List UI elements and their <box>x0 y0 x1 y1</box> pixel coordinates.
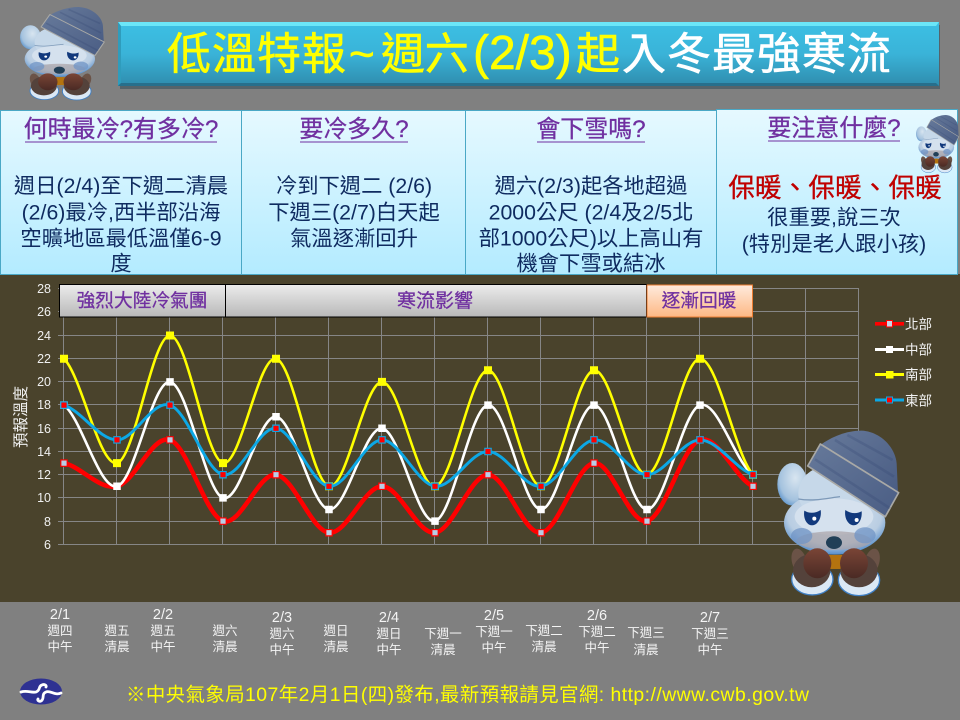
panel: will it snow <box>466 110 716 276</box>
series: central <box>64 382 753 521</box>
x axis labels <box>47 607 729 657</box>
y axis labels: 18 <box>37 398 51 412</box>
body text: (特別是老人跟小孩) <box>742 232 926 256</box>
body text: 空曠地區最低溫僅6-9 <box>20 226 222 250</box>
phase band: gradual warming <box>647 285 752 317</box>
title text: 低溫特報 <box>167 30 347 79</box>
red warning: 保暖、保暖、保暖 <box>728 173 942 203</box>
title text: 入冬最強寒流 <box>622 30 892 79</box>
title text <box>167 27 892 80</box>
x axis labels: 週五 <box>104 623 130 638</box>
mascot: small bear beside title <box>20 7 104 100</box>
x axis labels: 2/3 <box>272 610 292 626</box>
series: east <box>64 405 753 486</box>
phase band: gradual warming: 逐漸回暖 <box>662 290 737 311</box>
x axis labels: 中午 <box>376 642 402 657</box>
y axis labels: 10 <box>37 491 51 505</box>
x axis labels: 2/4 <box>379 610 399 626</box>
title text: 週六 <box>381 30 469 79</box>
heading: 會下雪嗎? <box>536 116 646 143</box>
x axis labels: 清晨 <box>104 640 130 654</box>
x axis labels: 清晨 <box>633 643 659 657</box>
body text: 部1000公尺)以上高山有 <box>479 226 703 250</box>
icon: weather bureau logo <box>20 678 62 704</box>
phase band: cold surge impact <box>226 284 646 317</box>
title text: (2/3) <box>473 27 572 80</box>
y axis labels: 12 <box>37 468 51 482</box>
legend: north: 北部 <box>905 317 932 332</box>
x axis labels: 週四 <box>47 623 73 638</box>
x axis labels: 下週二 <box>578 624 616 639</box>
y axis labels: 22 <box>37 352 51 366</box>
x axis labels: 下週二 <box>525 623 563 638</box>
x axis labels: 清晨 <box>430 643 456 657</box>
x axis labels: 週日 <box>376 626 402 641</box>
x axis labels: 2/1 <box>50 607 70 623</box>
line chart <box>12 282 858 552</box>
body text: 機會下雪或結冰 <box>516 252 666 276</box>
legend: south: 南部 <box>905 368 932 382</box>
x axis labels: 週日 <box>323 623 349 638</box>
panel: when is coldest <box>0 110 242 276</box>
y axis labels: 20 <box>37 375 51 389</box>
x axis labels: 2/7 <box>700 610 720 626</box>
series: north <box>64 439 753 533</box>
body text: 氣溫逐漸回升 <box>290 226 418 250</box>
y axis labels: 6 <box>44 538 51 552</box>
y axis labels: 16 <box>37 422 51 436</box>
y axis labels: 8 <box>44 515 51 529</box>
y axis title: 預報溫度 <box>12 386 30 448</box>
x axis labels: 中午 <box>47 639 73 654</box>
y axis labels: 24 <box>37 329 51 343</box>
x axis labels: 週六 <box>212 623 238 638</box>
heading: 要冷多久? <box>299 116 409 143</box>
x axis labels: 清晨 <box>531 640 557 654</box>
x axis labels: 中午 <box>150 639 176 654</box>
x axis labels: 中午 <box>481 640 507 655</box>
body text: 週日(2/4)至下週二清晨 <box>14 174 228 198</box>
x axis labels: 清晨 <box>323 640 349 654</box>
series: south <box>64 336 753 486</box>
legend: east: 東部 <box>905 394 932 408</box>
body text: 2000公尺 (2/4及2/5北 <box>489 200 693 224</box>
title text: 起 <box>576 30 620 79</box>
heading: 何時最冷?有多冷? <box>24 116 218 143</box>
y axis labels <box>37 282 51 552</box>
x axis labels: 清晨 <box>212 640 238 654</box>
x axis labels: 2/6 <box>587 608 607 624</box>
y axis labels: 14 <box>37 445 51 459</box>
legend <box>875 317 932 408</box>
mascot: tiny bear in panel <box>916 115 959 173</box>
body text: 週六(2/3)起各地超過 <box>495 174 687 198</box>
mascot: large bear <box>777 431 899 596</box>
chart background panel <box>0 274 960 602</box>
footer note: ※中央氣象局107年2月1日(四)發布,最新預報請見官網: http://www.cwb.gov.tw <box>126 684 810 706</box>
x axis labels: 週六 <box>269 626 295 641</box>
phase band: strong continental air mass <box>60 284 226 317</box>
panel: how long <box>242 110 466 274</box>
x axis labels: 下週一 <box>475 624 513 639</box>
phase band: cold surge impact: 寒流影響 <box>397 290 473 312</box>
title banner <box>118 22 940 89</box>
x axis labels: 週五 <box>150 623 176 638</box>
phase band: strong continental air mass: 強烈大陸冷氣團 <box>77 290 207 311</box>
y axis labels: 26 <box>37 305 51 319</box>
body text: 很重要,說三次 <box>767 206 901 230</box>
y axis labels: 28 <box>37 282 51 296</box>
legend: central: 中部 <box>905 342 932 358</box>
x axis labels: 下週一 <box>424 626 462 641</box>
x axis labels: 中午 <box>269 642 295 657</box>
title text: ~ <box>349 30 375 79</box>
x axis labels: 中午 <box>584 640 610 655</box>
body text: 下週三(2/7)白天起 <box>268 200 440 224</box>
x axis labels: 2/2 <box>153 607 173 623</box>
panel: what to watch out for <box>716 110 958 274</box>
body text: (2/6)最冷,西半部沿海 <box>22 200 220 224</box>
x axis labels: 2/5 <box>484 608 504 624</box>
heading: 要注意什麼? <box>767 115 901 142</box>
x axis labels: 中午 <box>697 642 723 657</box>
body text: 度 <box>110 252 132 276</box>
x axis labels: 下週三 <box>627 625 665 640</box>
body text: 冷到下週二 (2/6) <box>276 174 432 198</box>
x axis labels: 下週三 <box>691 626 729 641</box>
